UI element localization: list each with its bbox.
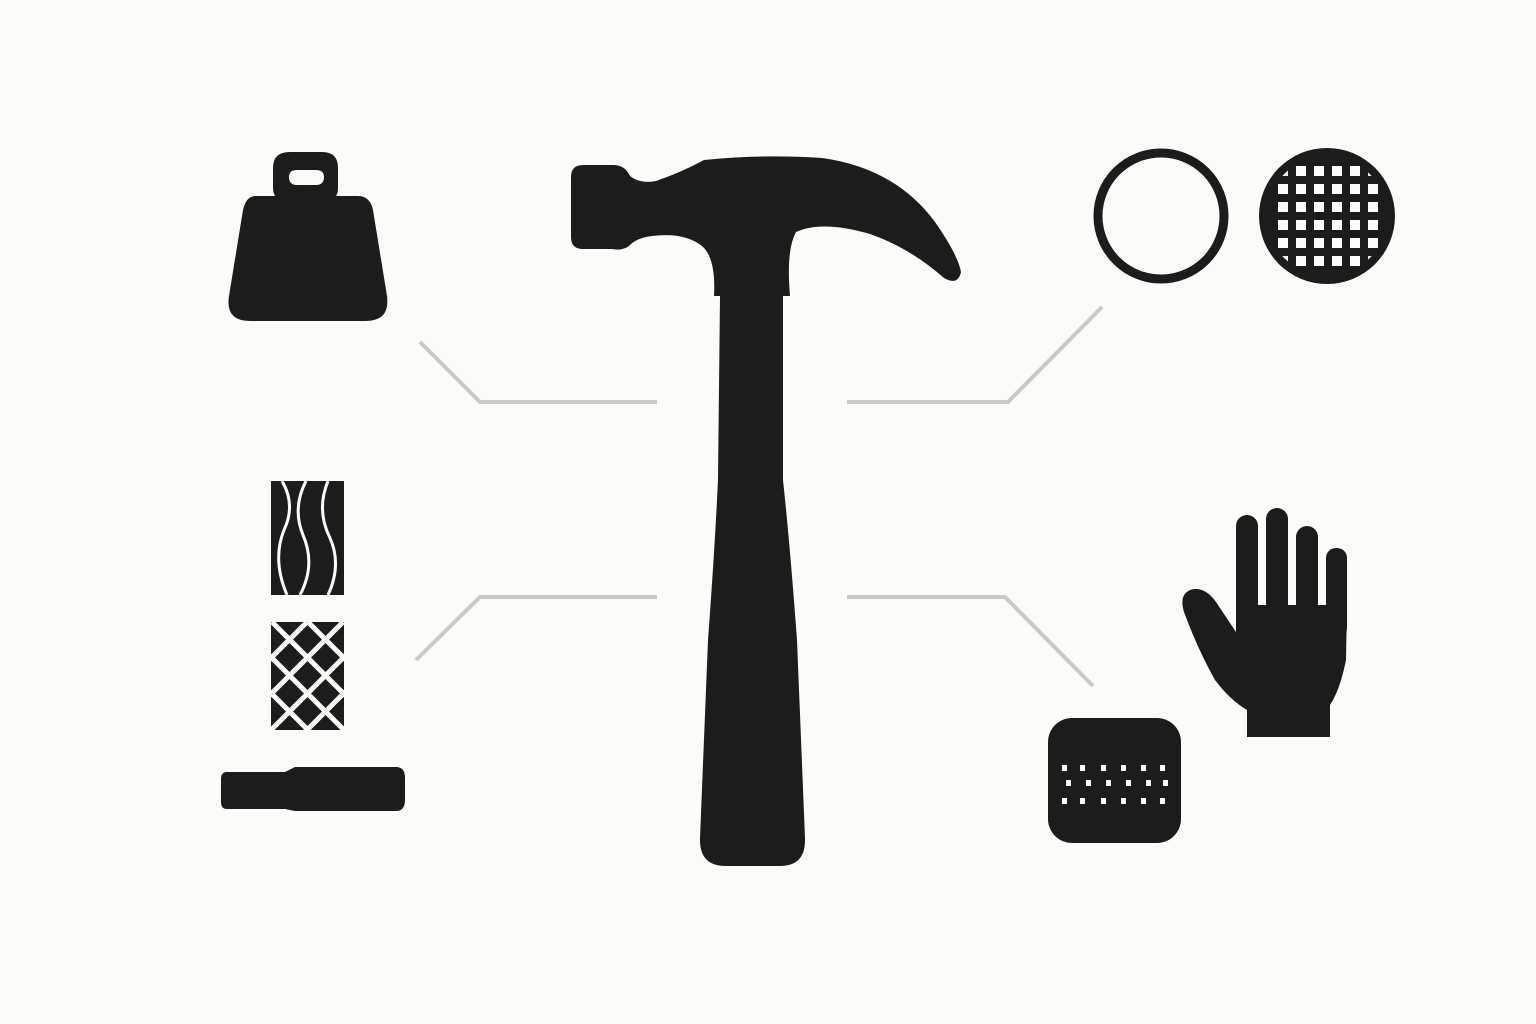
icon: ring — [1098, 153, 1224, 279]
icon: weight — [228, 152, 387, 321]
icon: mesh circle — [1259, 148, 1395, 284]
icon: rubber grip pad — [1048, 718, 1181, 843]
icon: crosshatch texture — [271, 622, 344, 730]
icon: glove — [1182, 508, 1347, 737]
icon: wood grain — [271, 481, 344, 595]
icon: bar / chisel — [221, 767, 405, 811]
infographic canvas — [221, 148, 1395, 866]
icon: hammer — [571, 156, 961, 866]
